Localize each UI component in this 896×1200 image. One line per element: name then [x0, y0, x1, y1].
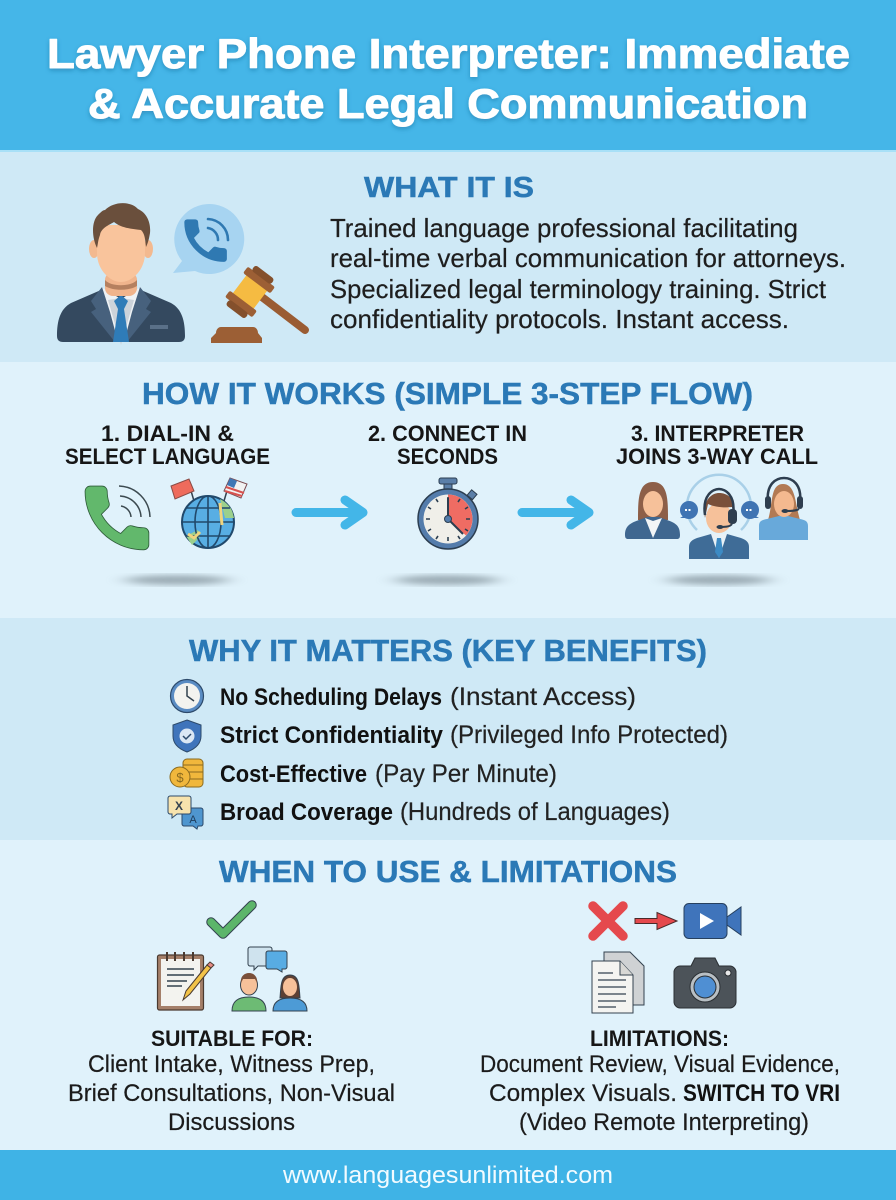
limitations text [480, 1026, 840, 1136]
step 2 label: SECONDS [397, 444, 498, 469]
footer url: www.languagesunlimited.com [282, 1162, 613, 1189]
icon: stopwatch [418, 478, 478, 549]
limitations text: Complex Visuals. [489, 1080, 677, 1107]
suitable for text [68, 1026, 395, 1136]
icon: camera [674, 958, 736, 1008]
benefit 3 [220, 760, 557, 788]
step 2 label [368, 421, 527, 469]
icon: red cross [593, 906, 623, 936]
icon: translation bubbles: X [175, 799, 183, 813]
step 3 label [616, 421, 818, 469]
benefit 3: Cost-Effective [220, 761, 367, 788]
heading: what it is: WHAT IT IS [364, 172, 534, 204]
heading: when to use: WHEN TO USE & LIMITATIONS [219, 854, 677, 889]
text: description [330, 213, 846, 334]
text: description: Specialized legal terminology training. Strict [330, 274, 827, 304]
arrow [296, 500, 363, 525]
benefit 4: (Hundreds of Languages) [400, 798, 670, 826]
panel: what it is [0, 150, 896, 362]
icon: notepad and pencil [158, 952, 214, 1010]
step 3 label: JOINS 3-WAY CALL [616, 444, 818, 469]
limitations text: Document Review, Visual Evidence, [480, 1051, 840, 1078]
suitable for text: SUITABLE FOR: [151, 1026, 313, 1051]
icon: check mark [211, 905, 252, 934]
icon: gavel [211, 262, 305, 343]
icon: three-way call people [625, 475, 808, 559]
benefit 1: (Instant Access) [450, 683, 636, 711]
arrow [522, 500, 589, 525]
limitations text: SWITCH TO VRI [683, 1080, 840, 1107]
step 1 label: SELECT LANGUAGE [65, 444, 270, 469]
benefit 2: (Privileged Info Protected) [450, 721, 728, 749]
icon: coins [170, 759, 203, 787]
benefit 2 [220, 721, 728, 749]
panel: when to use and limitations [0, 840, 896, 1150]
benefit 1 [220, 683, 636, 711]
icon: translation bubbles: A [189, 814, 197, 826]
header band [0, 0, 896, 150]
suitable for text: Client Intake, Witness Prep, [88, 1051, 375, 1078]
benefit 4: Broad Coverage [220, 799, 393, 826]
step 1 label [65, 421, 270, 469]
suitable for text: Discussions [168, 1109, 295, 1136]
benefit 1: No Scheduling Delays [220, 684, 442, 711]
icon: switch arrow [635, 912, 677, 930]
icon: two people talking [232, 947, 307, 1011]
step 3 label: 3. INTERPRETER [631, 421, 804, 446]
step 2 label: 2. CONNECT IN [368, 421, 527, 446]
text: description: confidentiality protocols. Instant access. [330, 304, 789, 334]
icon: documents [592, 952, 644, 1013]
limitations text: (Video Remote Interpreting) [519, 1109, 809, 1136]
icon: globe with flags [171, 478, 247, 548]
icon: green phone [87, 486, 150, 548]
icon: shield [173, 720, 201, 752]
icon: translation bubbles [168, 796, 203, 829]
heading: why it matters: WHY IT MATTERS (KEY BENEFITS) [189, 633, 707, 668]
heading: how it works: HOW IT WORKS (SIMPLE 3-STEP FLOW) [142, 376, 753, 411]
title: & Accurate Legal Communication [88, 80, 808, 127]
panel: why it matters [0, 618, 896, 840]
step 1 label: 1. DIAL-IN & [101, 421, 234, 446]
title: Lawyer Phone Interpreter: Immediate [47, 30, 850, 77]
panel: how it works [0, 362, 896, 618]
ground shadows [125, 575, 771, 585]
benefit 2: Strict Confidentiality [220, 722, 444, 749]
icon: coins: $ [176, 770, 184, 785]
icon: video camera [684, 904, 741, 938]
limitations text: LIMITATIONS: [590, 1026, 729, 1051]
icon: clock [170, 680, 204, 712]
suitable for text: Brief Consultations, Non-Visual [68, 1080, 395, 1107]
footer band [0, 1150, 896, 1200]
title [47, 30, 850, 127]
text: description: Trained language professional facilitating [330, 213, 798, 243]
icon: phone speech bubble [173, 204, 244, 274]
icon: lawyer [57, 203, 185, 345]
benefit 3: (Pay Per Minute) [375, 760, 557, 788]
text: description: real-time verbal communication for attorneys. [330, 243, 846, 273]
benefit 4 [220, 798, 670, 826]
